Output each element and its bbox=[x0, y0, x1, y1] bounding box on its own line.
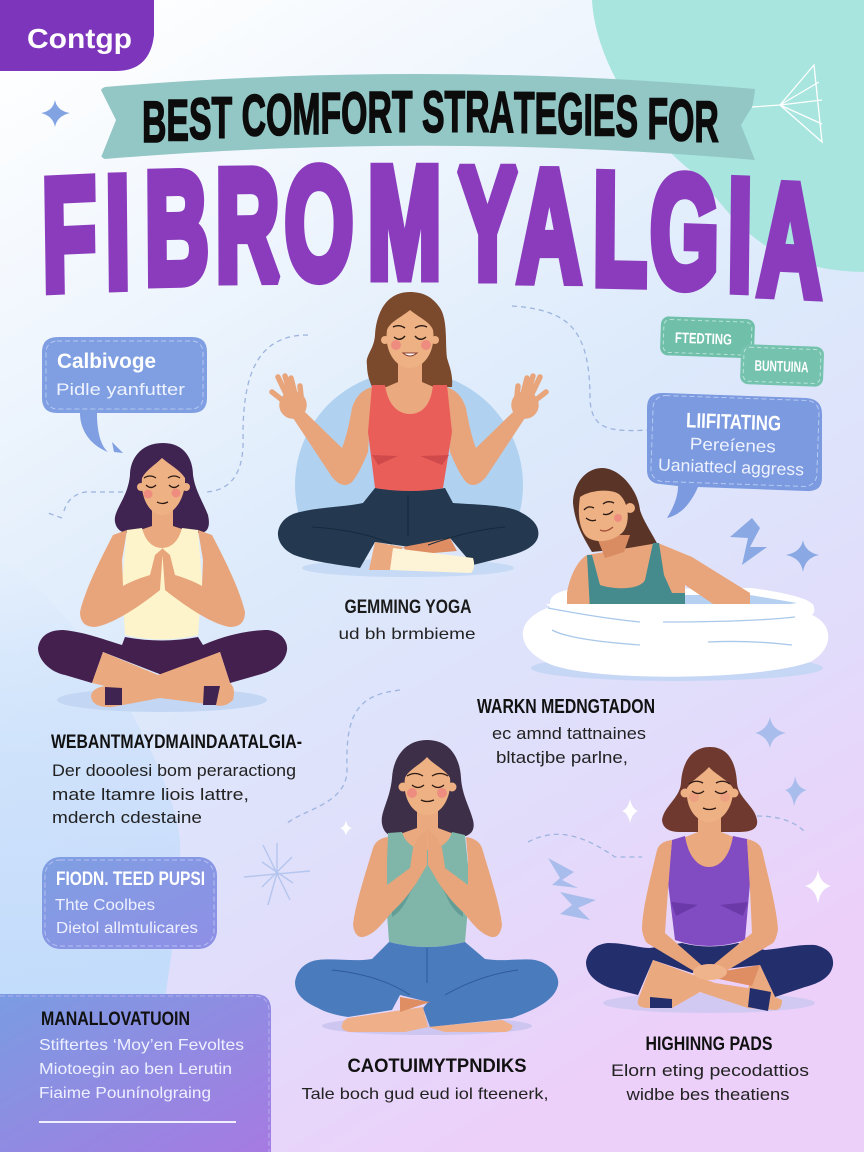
box: food tips: FIODN. TEED PUPSI bbox=[56, 869, 205, 890]
face bbox=[387, 310, 433, 368]
red top bbox=[368, 385, 452, 492]
label: heating pads: HIGHINNG PADS bbox=[646, 1034, 772, 1055]
figure: woman in bath bbox=[523, 468, 828, 681]
left arm bbox=[642, 840, 707, 973]
hair bbox=[115, 443, 209, 533]
neck and chest bbox=[140, 510, 185, 560]
box: manual lovation: MANALLOVATUOIN bbox=[41, 1009, 190, 1030]
tags: top right: FTEDTING bbox=[675, 330, 732, 349]
heading: ribbon text: BEST COMFORT STRATEGIES FOR bbox=[142, 81, 719, 155]
logo badge: Contgp bbox=[27, 23, 132, 54]
backdrop circle bbox=[295, 371, 523, 515]
tags: top right: BUNTUINA bbox=[754, 357, 809, 376]
icons: lightning and sparkles bbox=[340, 717, 831, 920]
box: food tips: Dietol allmtulicares bbox=[56, 920, 198, 937]
shins and feet bbox=[638, 960, 782, 1010]
corner blob: mint bbox=[592, 0, 864, 272]
icon: lightning and star right bbox=[730, 518, 819, 572]
navy legs bbox=[586, 943, 833, 997]
label: yoga bbox=[338, 597, 476, 643]
callout: top left: Calbivoge bbox=[57, 350, 156, 373]
left arm bbox=[293, 387, 372, 485]
label: yoga: GEMMING YOGA bbox=[344, 597, 472, 618]
figure: yoga woman centre bbox=[272, 292, 546, 577]
tags: top right bbox=[659, 316, 825, 387]
label: warm meditation: ec amnd tattnaines bbox=[492, 725, 646, 743]
callout: top left bbox=[42, 337, 207, 453]
hands bbox=[693, 964, 727, 980]
purple top bbox=[668, 836, 750, 946]
label: warm meditation bbox=[477, 696, 655, 767]
right arm bbox=[446, 387, 525, 485]
hair bbox=[662, 747, 757, 832]
purple legs bbox=[38, 630, 287, 683]
face bbox=[687, 767, 733, 822]
dashed connectors bbox=[48, 306, 805, 857]
text block: left bbox=[51, 732, 302, 827]
face bbox=[142, 458, 185, 515]
callout: top right: LIIFITATING bbox=[686, 409, 781, 436]
icon: paper fan lines bbox=[752, 65, 822, 142]
box: food tips: Thte Coolbes bbox=[55, 897, 155, 914]
figure: woman in cream top bbox=[38, 443, 287, 712]
label: centre bottom: CAOTUIMYTPNDIKS bbox=[348, 1056, 526, 1077]
crossed shins bbox=[91, 652, 234, 707]
left hand bbox=[272, 376, 304, 416]
left foot bbox=[342, 1007, 428, 1032]
neck and chest bbox=[400, 810, 454, 865]
callout: top left: Pidle yanfutter bbox=[56, 380, 185, 399]
text block: left: mate ltamre liois lattre, bbox=[52, 785, 249, 804]
ankle bands bbox=[650, 988, 771, 1011]
logo badge bbox=[0, 0, 154, 71]
body bbox=[567, 543, 750, 610]
title ribbon bbox=[101, 74, 755, 160]
navy legs bbox=[278, 488, 538, 568]
figure: woman in purple top bbox=[586, 747, 833, 1013]
blue legs bbox=[295, 942, 558, 1027]
callout: top right bbox=[647, 393, 822, 518]
hair bbox=[573, 468, 658, 552]
decorative lower-left blob bbox=[0, 555, 180, 1000]
box: food tips bbox=[42, 857, 217, 949]
hair bbox=[367, 292, 452, 387]
teal top bbox=[385, 832, 470, 947]
hair bbox=[382, 740, 474, 836]
box: manual lovation: Fiaime Pounínolgraing bbox=[39, 1085, 211, 1102]
text block: left: Der dooolesi bom peraractiong bbox=[52, 761, 296, 780]
right arm bbox=[162, 530, 245, 627]
label: centre bottom bbox=[302, 1056, 548, 1103]
icon: sparkle top-left bbox=[41, 100, 70, 127]
ground shadow bbox=[603, 993, 815, 1013]
callout: top right: Pereíenes bbox=[690, 434, 776, 456]
box: manual lovation: Miotoegin ao ben Lerutin bbox=[39, 1061, 232, 1078]
right arm bbox=[707, 839, 778, 973]
text block: left: mderch cdestaine bbox=[52, 808, 202, 827]
figure: woman in teal top bbox=[295, 740, 558, 1035]
crossed shin bbox=[369, 542, 403, 570]
main title: FIBROMYALGIA bbox=[41, 135, 823, 331]
box: manual lovation: Stiftertes ‘Moy’en Fevoltes bbox=[39, 1037, 244, 1054]
ground shadow bbox=[57, 688, 267, 712]
neck and face bbox=[596, 535, 630, 558]
label: warm meditation: bltactjbe parlne, bbox=[496, 749, 628, 767]
right arm and hand bbox=[428, 830, 502, 937]
right hand bbox=[514, 376, 546, 416]
left arm bbox=[80, 530, 163, 627]
text block: left: WEBANTMAYDMAINDAATALGIA- bbox=[51, 732, 302, 753]
ground shadow bbox=[302, 559, 514, 577]
teal tank bbox=[587, 543, 685, 610]
neck and chest bbox=[384, 362, 436, 420]
label: centre bottom: Tale boch gud eud iol fteenerk, bbox=[302, 1086, 548, 1103]
label: heating pads: widbe bes theatiens bbox=[625, 1086, 790, 1104]
label: heating pads: Elorn eting pecodattios bbox=[611, 1062, 809, 1080]
left arm and hand bbox=[353, 830, 427, 937]
icon: starburst bbox=[244, 843, 310, 905]
box: manual lovation bbox=[0, 994, 271, 1152]
ground shadow bbox=[322, 1017, 532, 1035]
label: yoga: ud bh brmbieme bbox=[338, 626, 476, 643]
right foot bbox=[428, 1020, 512, 1032]
tub front bbox=[523, 604, 828, 677]
label: warm meditation: WARKN MEDNGTADON bbox=[477, 696, 655, 718]
tub shadow bbox=[531, 655, 823, 681]
face bbox=[405, 757, 450, 815]
cream top bbox=[122, 528, 202, 640]
cream sock bbox=[390, 548, 474, 573]
tub back and water bbox=[550, 588, 813, 610]
neck and chest bbox=[683, 815, 736, 870]
label: heating pads bbox=[611, 1034, 809, 1104]
ankle bands bbox=[105, 686, 220, 705]
callout: top right: Uaniattecl aggress bbox=[658, 455, 804, 479]
